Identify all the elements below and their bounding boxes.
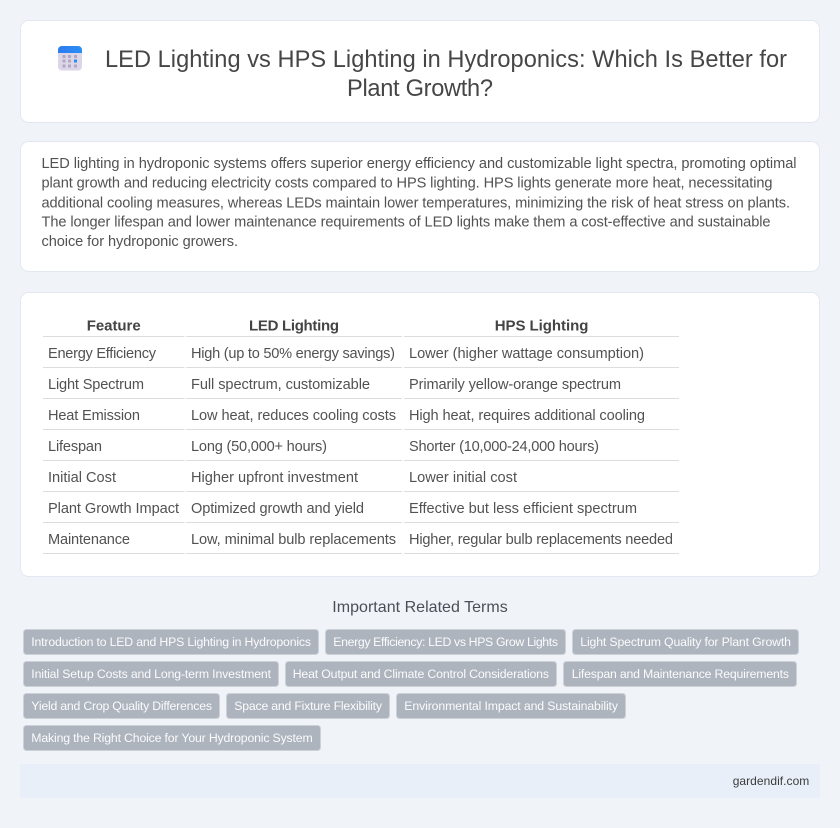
text block: introduction xyxy=(42,156,796,250)
row: maintenance xyxy=(48,532,673,548)
row: lifespan: Long (50,000+ hours) xyxy=(191,439,327,455)
title: Plant Growth? xyxy=(347,76,493,102)
title xyxy=(105,47,787,102)
row: heat emission xyxy=(48,408,645,424)
footer xyxy=(20,764,820,798)
tag: Light Spectrum Quality for Plant Growth xyxy=(580,635,791,649)
table header xyxy=(87,318,588,334)
row: heat emission: Heat Emission xyxy=(48,408,140,424)
table header: HPS Lighting xyxy=(495,318,588,334)
row: plant growth impact: Optimized growth and yield xyxy=(191,501,364,517)
text block: introduction: plant growth and reducing electricity costs compared to HPS lighting. HPS lights generate more heat, necessitating xyxy=(42,176,772,192)
panel: introduction xyxy=(20,142,820,272)
row: heat emission: Low heat, reduces cooling costs xyxy=(191,408,396,424)
tag xyxy=(564,662,796,686)
tag xyxy=(396,694,626,718)
tag xyxy=(226,694,390,718)
panel: comparison table xyxy=(20,292,820,576)
footer: gardendif.com xyxy=(733,774,809,788)
text block: introduction: additional cooling measures, whereas LEDs maintain lower temperatures, minimizing the risk of heat stress on plants. xyxy=(42,196,790,212)
row: plant growth impact: Plant Growth Impact xyxy=(48,501,179,517)
row: plant growth impact: Effective but less efficient spectrum xyxy=(409,501,637,517)
panel: header xyxy=(20,20,820,122)
tag: Lifespan and Maintenance Requirements xyxy=(572,667,789,681)
row: light spectrum: Full spectrum, customizable xyxy=(191,377,370,393)
row: energy efficiency: Energy Efficiency xyxy=(48,346,157,362)
row: maintenance: Low, minimal bulb replacements xyxy=(191,532,396,548)
row: energy efficiency: High (up to 50% energy savings) xyxy=(191,346,395,362)
row: initial cost: Initial Cost xyxy=(48,470,116,486)
row: maintenance: Higher, regular bulb replacements needed xyxy=(409,532,673,548)
related terms tags xyxy=(24,630,798,750)
row: plant growth impact xyxy=(48,501,637,517)
tag: Introduction to LED and HPS Lighting in Hydroponics xyxy=(31,635,311,649)
tag: Initial Setup Costs and Long-term Investment xyxy=(31,667,272,681)
row: lifespan xyxy=(48,439,599,455)
table rules xyxy=(43,336,679,554)
tag xyxy=(24,630,318,654)
heading: related terms: Important Related Terms xyxy=(332,599,508,616)
row: lifespan: Shorter (10,000-24,000 hours) xyxy=(409,439,599,455)
row: energy efficiency xyxy=(48,346,644,362)
tag xyxy=(572,630,798,654)
tag xyxy=(24,662,278,686)
text block: introduction: The longer lifespan and lower maintenance requirements of LED lights make them a cost-effective and sustainable xyxy=(42,214,770,230)
row: initial cost: Higher upfront investment xyxy=(191,470,358,486)
row: lifespan: Lifespan xyxy=(48,439,102,455)
row: energy efficiency: Lower (higher wattage consumption) xyxy=(409,346,644,362)
title: LED Lighting vs HPS Lighting in Hydroponics: Which Is Better for xyxy=(105,47,787,73)
tag xyxy=(286,662,556,686)
table header: Feature xyxy=(87,318,141,334)
row: initial cost xyxy=(48,470,517,486)
tag: Heat Output and Climate Control Considerations xyxy=(293,667,549,681)
tag: Yield and Crop Quality Differences xyxy=(31,699,212,713)
tag: Environmental Impact and Sustainability xyxy=(404,699,619,713)
tag: Making the Right Choice for Your Hydroponic System xyxy=(31,731,313,745)
icon: calendar xyxy=(58,46,82,70)
tag: Space and Fixture Flexibility xyxy=(234,699,383,713)
text block: introduction: LED lighting in hydroponic systems offers superior energy efficiency and customizable light spectra, promoting optimal xyxy=(42,156,796,172)
tag xyxy=(24,726,320,750)
tag xyxy=(24,694,220,718)
row: heat emission: High heat, requires additional cooling xyxy=(409,408,645,424)
row: light spectrum: Primarily yellow-orange spectrum xyxy=(409,377,621,393)
table header: LED Lighting xyxy=(249,318,339,334)
tag xyxy=(326,630,566,654)
row: light spectrum: Light Spectrum xyxy=(48,377,144,393)
text block: introduction: choice for hydroponic growers. xyxy=(42,234,238,250)
row: maintenance: Maintenance xyxy=(48,532,130,548)
tag: Energy Efficiency: LED vs HPS Grow Lights xyxy=(333,635,558,649)
row: initial cost: Lower initial cost xyxy=(409,470,517,486)
row: light spectrum xyxy=(48,377,621,393)
